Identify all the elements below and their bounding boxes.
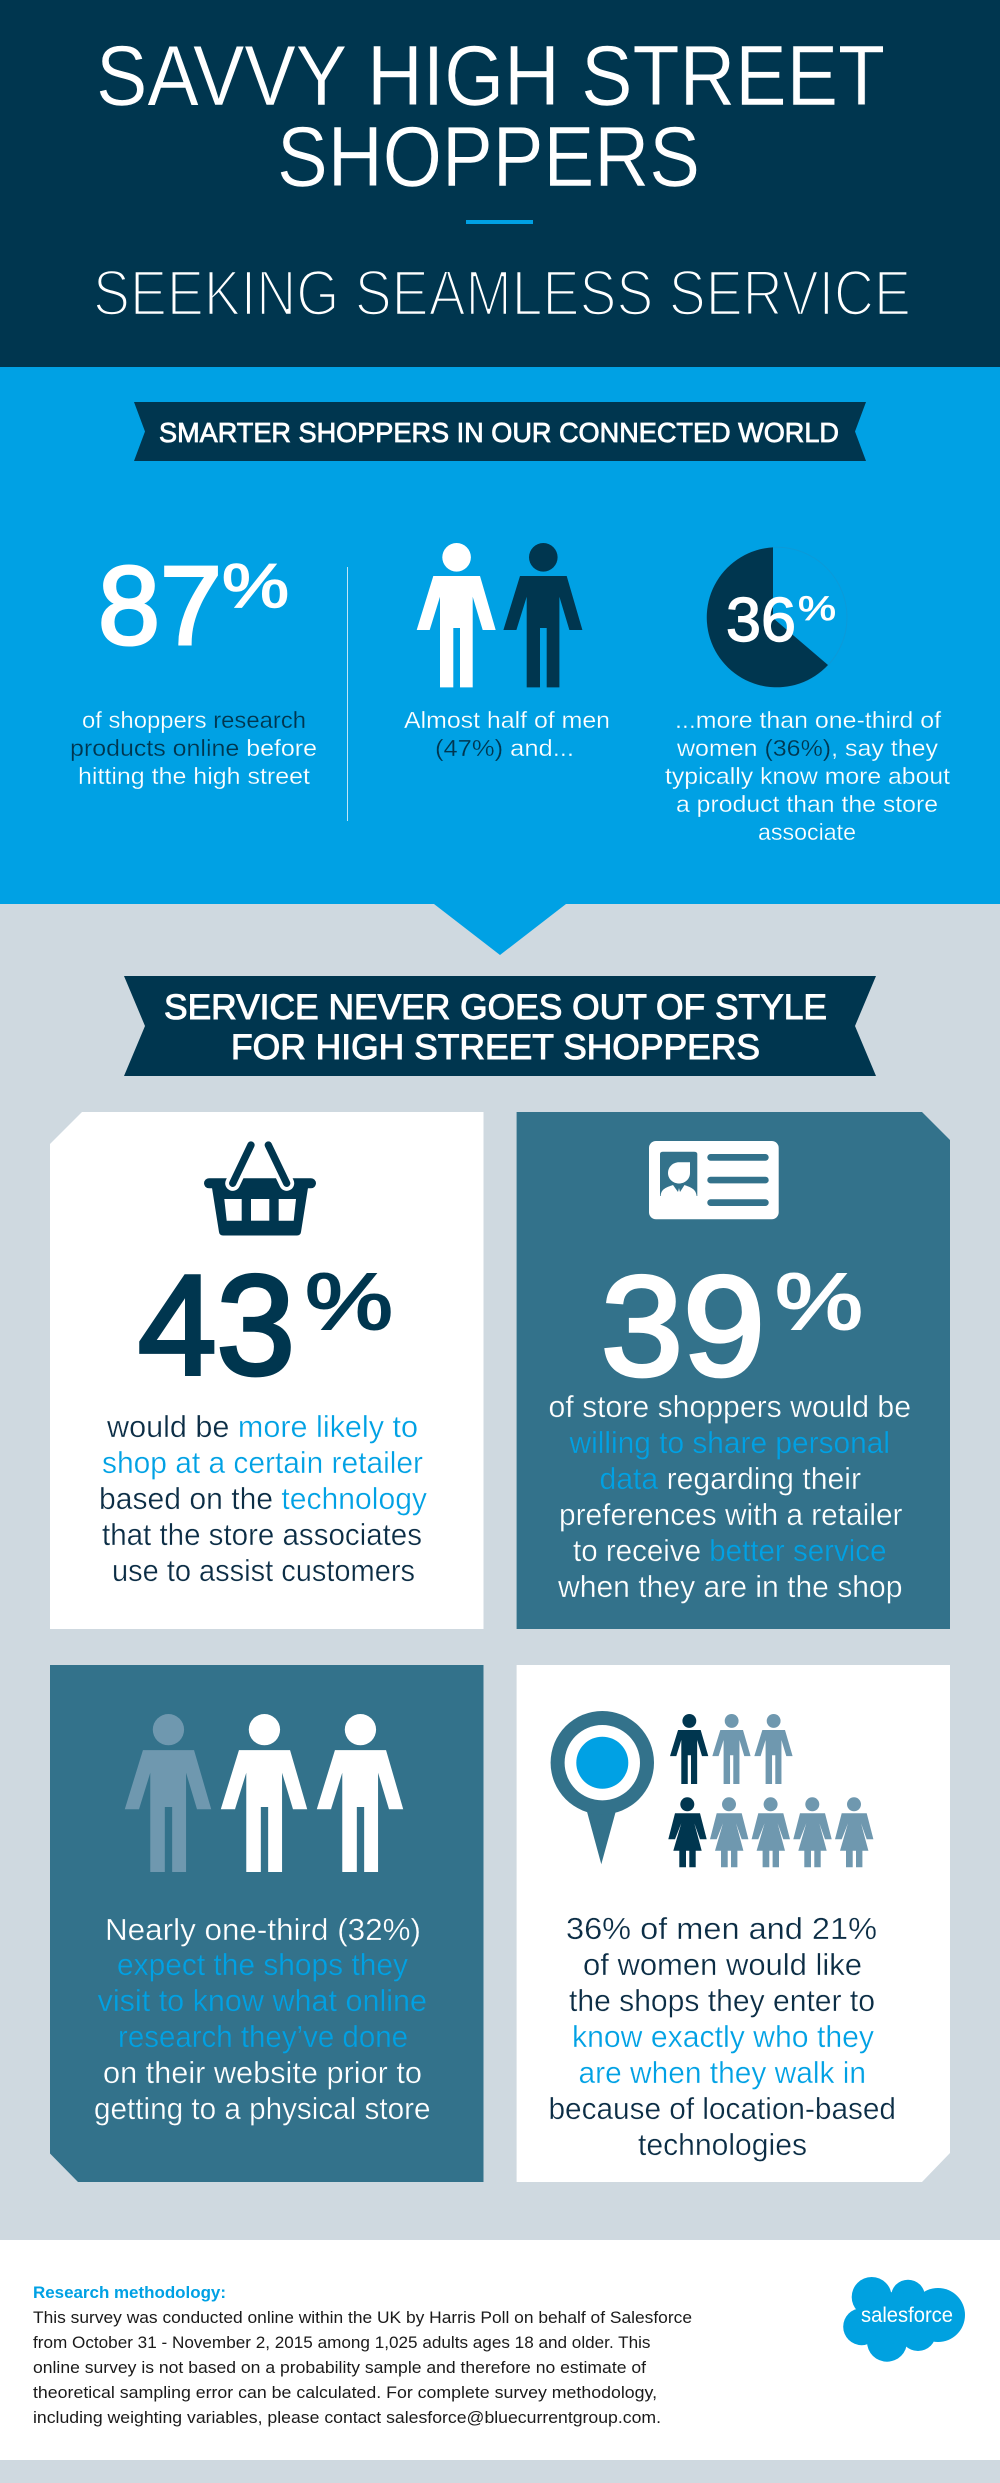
research methodology: online survey is not based on a probability sample and therefore no estimate of xyxy=(33,2359,646,2377)
text: more likely to shop: would be more likely to xyxy=(106,1410,418,1444)
text: 87% of shoppers: hitting the high street xyxy=(78,763,311,789)
text: nearly one-third: getting to a physical store xyxy=(94,2092,430,2126)
icon: three people xyxy=(125,1714,403,1872)
stat: 87%: 87 xyxy=(98,544,222,668)
text: 36% of men and 21%: because of location-based xyxy=(548,2092,896,2126)
ribbon heading: SMARTER SHOPPERS IN OUR CONNECTED WORLD xyxy=(159,417,839,448)
research methodology: from October 31 - November 2, 2015 among 1,025 adults ages 18 and older. This xyxy=(33,2334,651,2352)
card: 32% xyxy=(50,1665,484,2182)
icon: men row xyxy=(670,1714,793,1784)
ribbon heading: service never goes out of style: SERVICE NEVER GOES OUT OF STYLE xyxy=(164,988,827,1027)
stat: 43%: 43 xyxy=(138,1246,295,1405)
research methodology: This survey was conducted online within the UK by Harris Poll on behalf of Salesforce xyxy=(33,2309,692,2327)
text: 87% of shoppers xyxy=(70,707,317,789)
pie chart: 36%: % xyxy=(798,590,836,628)
text: almost half of men: (47%) and... xyxy=(435,735,574,761)
research methodology xyxy=(33,2284,692,2427)
text: nearly one-third: on their website prior to xyxy=(103,2056,422,2090)
stat: 39% xyxy=(601,1247,863,1406)
text: willing to share personal data: to receive better service xyxy=(573,1534,886,1568)
pie chart: 36% xyxy=(707,547,847,687)
text: more than one-third: typically know more about xyxy=(665,763,951,789)
text: 87% of shoppers: of shoppers research xyxy=(82,707,306,733)
text: almost half of men: Almost half of men xyxy=(404,707,610,733)
text: willing to share personal data: of store shoppers would be xyxy=(548,1390,911,1424)
text: willing to share personal data xyxy=(548,1390,911,1604)
title: SAVVY HIGH STREET xyxy=(96,29,885,124)
text: nearly one-third: visit to know what online xyxy=(98,1984,427,2018)
ribbon heading: service never goes out of style: FOR HIGH STREET SHOPPERS xyxy=(231,1028,760,1067)
panel: smarter shoppers xyxy=(0,367,1000,955)
text: willing to share personal data: willing to share personal xyxy=(569,1426,890,1460)
title: SHOPPERS xyxy=(277,110,700,205)
text: 36% of men and 21%: of women would like xyxy=(583,1948,862,1982)
text: more likely to shop: use to assist customers xyxy=(112,1554,415,1588)
header panel xyxy=(0,0,1000,367)
logo: salesforce cloud: salesforce xyxy=(861,2304,953,2327)
stat: 39%: % xyxy=(775,1257,863,1346)
text: more than one-third: a product than the store xyxy=(676,791,938,817)
text: 36% of men and 21%: are when they walk in xyxy=(578,2056,866,2090)
text: 36% of men and 21%: technologies xyxy=(638,2128,807,2162)
text: willing to share personal data: data regarding their xyxy=(600,1462,861,1496)
text: willing to share personal data: when they are in the shop xyxy=(557,1570,902,1604)
text: willing to share personal data: preferences with a retailer xyxy=(559,1498,902,1532)
research methodology: theoretical sampling error can be calculated. For complete survey methodology, xyxy=(33,2384,657,2402)
title xyxy=(96,29,885,205)
text: more likely to shop xyxy=(99,1410,428,1588)
card: location xyxy=(517,1665,950,2182)
icon: man white xyxy=(417,543,496,687)
text: almost half of men xyxy=(404,707,610,761)
research methodology: including weighting variables, please contact salesforce@bluecurrentgroup.com. xyxy=(33,2409,661,2427)
stat: 87%: % xyxy=(222,552,289,621)
research methodology: Research methodology: xyxy=(33,2284,226,2302)
text: nearly one-third xyxy=(94,1913,430,2126)
pie chart: 36%: 36 xyxy=(726,586,796,655)
ribbon heading xyxy=(134,402,866,461)
footer panel xyxy=(0,2240,1000,2460)
card: 39% xyxy=(517,1112,950,1629)
icon: basket xyxy=(204,1145,316,1236)
stat: 39%: 39 xyxy=(601,1247,765,1406)
icon: man navy xyxy=(503,543,582,687)
text: 87% of shoppers: products online before xyxy=(70,735,317,761)
accent rule xyxy=(466,220,533,224)
text: 36% of men and 21% xyxy=(548,1912,896,2162)
text: nearly one-third: Nearly one-third (32%) xyxy=(105,1913,421,1947)
text: 36% of men and 21%: 36% of men and 21% xyxy=(566,1912,877,1946)
text: 36% of men and 21%: the shops they enter to xyxy=(569,1984,875,2018)
icon: id card xyxy=(649,1141,779,1219)
text: 36% of men and 21%: know exactly who they xyxy=(572,2020,875,2054)
stat: 43% xyxy=(138,1246,393,1405)
text: more than one-third xyxy=(665,707,951,845)
icon: women row xyxy=(668,1797,873,1867)
stat: 87% xyxy=(98,544,289,668)
text: more than one-third: ...more than one-third of xyxy=(675,707,942,733)
card: 43% xyxy=(50,1112,484,1629)
logo: salesforce cloud xyxy=(843,2277,965,2362)
stat: 43%: % xyxy=(305,1257,393,1346)
ribbon heading: service never goes out of style xyxy=(124,976,876,1076)
text: nearly one-third: expect the shops they xyxy=(117,1948,409,1982)
text: more likely to shop: based on the technology xyxy=(99,1482,428,1516)
icon: location pin xyxy=(551,1711,654,1864)
text: nearly one-third: research they’ve done xyxy=(118,2020,408,2054)
text: more than one-third: associate xyxy=(758,819,856,845)
text: more than one-third: women (36%), say they xyxy=(676,735,939,761)
text: more likely to shop: that the store associates xyxy=(102,1518,422,1552)
text: more likely to shop: shop at a certain retailer xyxy=(102,1446,423,1480)
